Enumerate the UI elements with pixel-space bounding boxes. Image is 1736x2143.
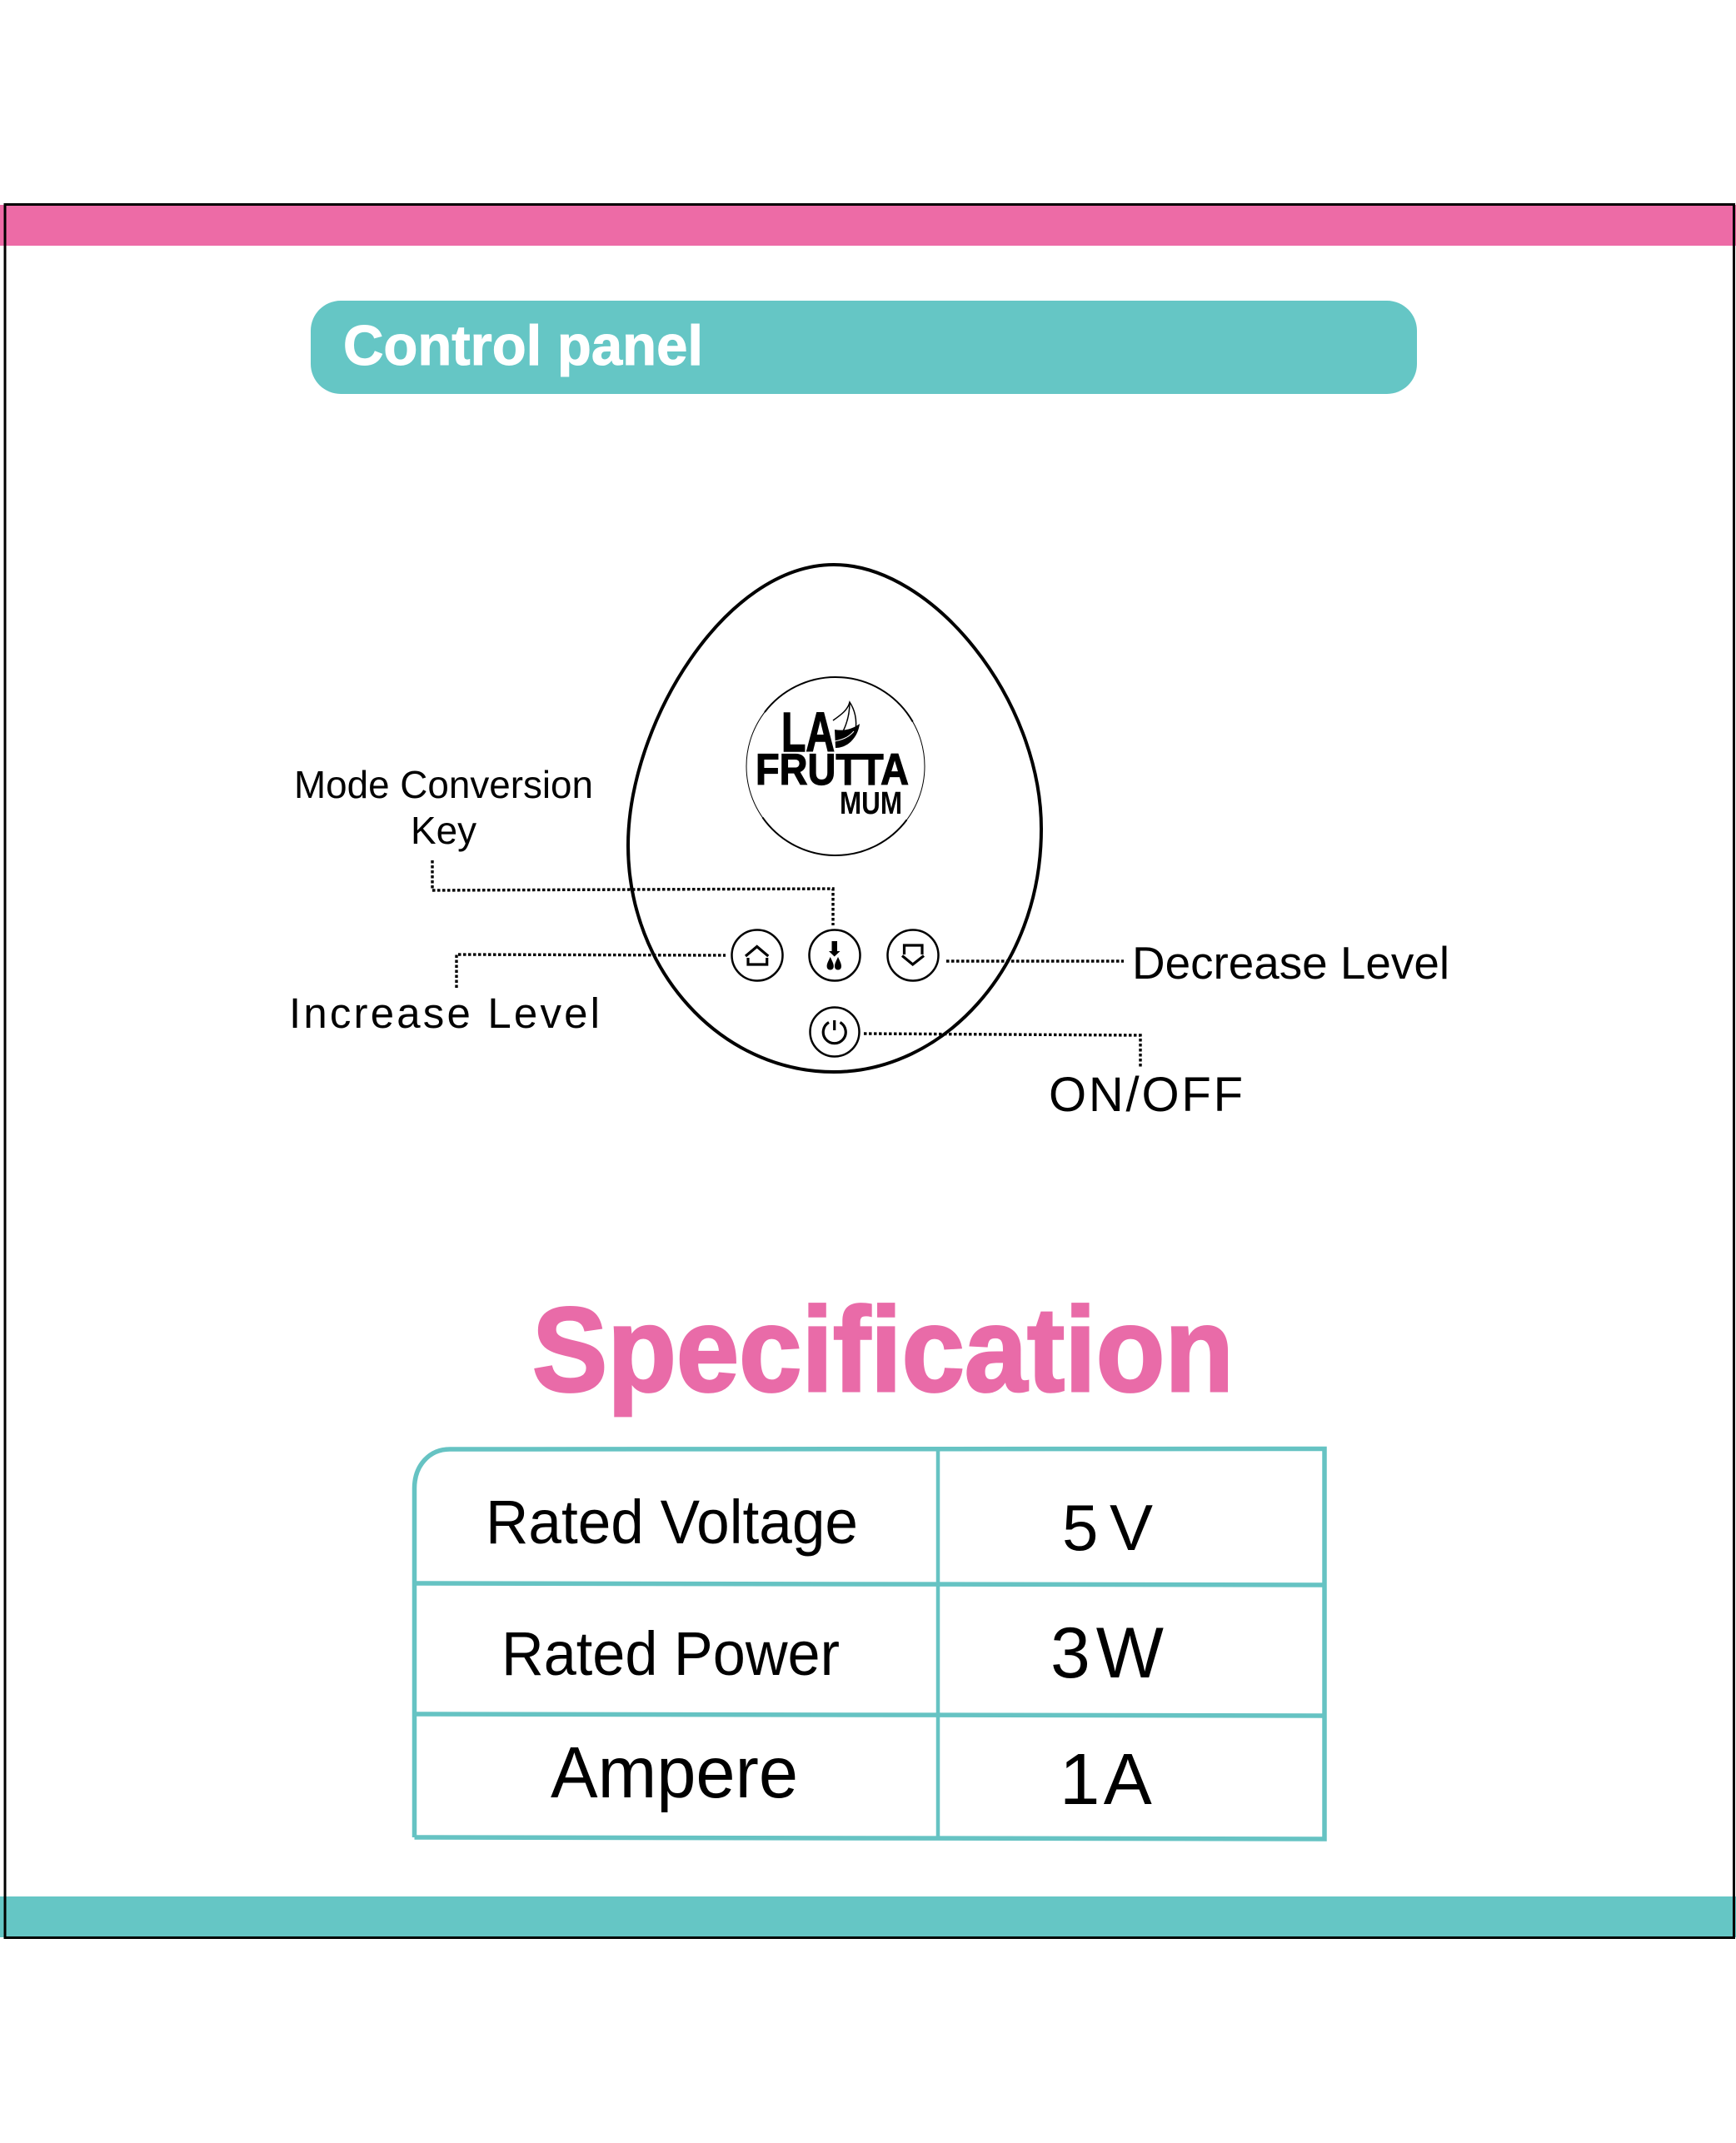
heading text: Control panel [343, 314, 703, 377]
row: ampere [551, 1732, 1152, 1820]
logo word LA: LA [781, 701, 835, 764]
label: increase level: Increase Level [289, 989, 600, 1037]
row: rated power [501, 1613, 1164, 1693]
leader: on/off [864, 1034, 1140, 1068]
logo: La Frutta Mum [746, 677, 925, 855]
leader: mode conversion key [432, 860, 833, 925]
button: decrease level [888, 929, 938, 981]
panel: control panel heading [311, 301, 1417, 394]
label: decrease level: Decrease Level [1132, 937, 1449, 989]
logo word MUM: MUM [840, 786, 902, 821]
specification title: Specification [532, 1283, 1234, 1417]
leader: increase level [456, 954, 726, 988]
bottom teal band [0, 1896, 1736, 1937]
row: rated voltage [486, 1488, 1153, 1564]
device outline [628, 565, 1041, 1072]
logo leaf [833, 702, 860, 748]
row: rated power: 3 W [1050, 1613, 1164, 1693]
button: increase level [731, 929, 783, 981]
panel: control panel diagram [289, 565, 1449, 1122]
label: mode conversion key [294, 763, 593, 852]
label: on/off: ON/OFF [1049, 1068, 1243, 1122]
top pink band [0, 205, 1736, 246]
button: power [810, 1008, 860, 1056]
button: mode conversion [810, 929, 860, 981]
logo word FRUTTA: FRUTTA [756, 745, 909, 795]
label: mode conversion key: Mode Conversion [294, 763, 593, 806]
row: rated voltage: Rated Voltage [486, 1488, 858, 1557]
row: ampere: Ampere [551, 1732, 798, 1813]
rated power label: Rated Power [501, 1619, 840, 1688]
table grid [415, 1449, 1324, 1839]
row: ampere: 1 A [1060, 1739, 1152, 1820]
specification table [415, 1449, 1324, 1839]
label: mode conversion key: Key [411, 809, 476, 852]
row: rated voltage: 5 V [1062, 1491, 1153, 1564]
leader: decrease level [946, 959, 1124, 963]
